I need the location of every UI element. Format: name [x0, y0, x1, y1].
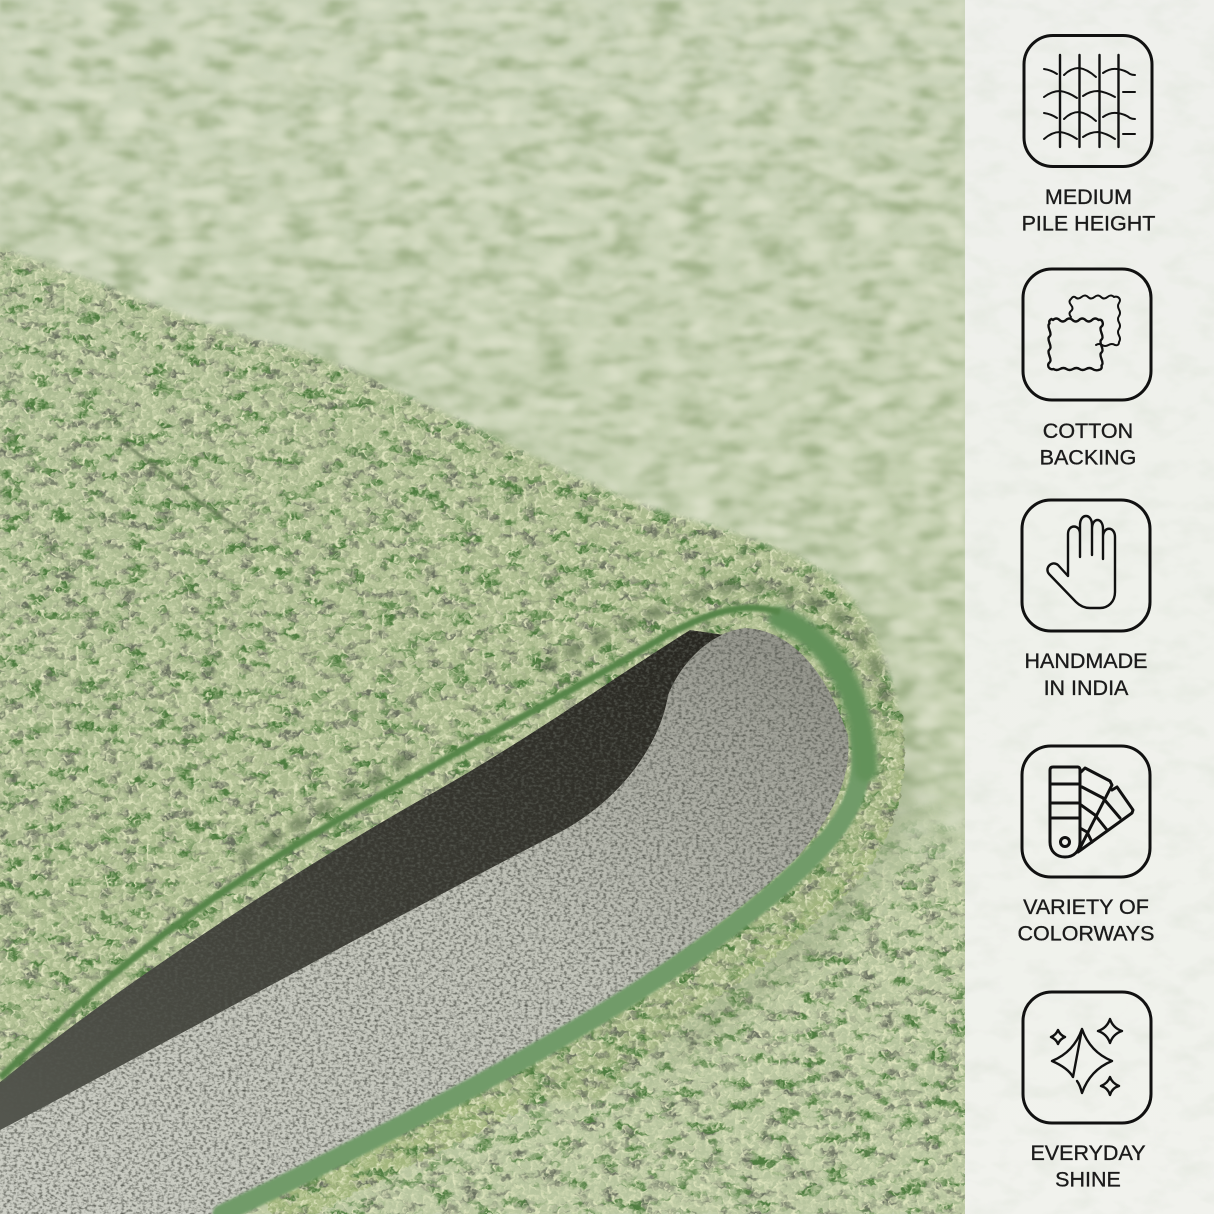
feature: medium pile height — [1022, 36, 1155, 236]
label: variety of colorways: VARIETY OF — [1023, 895, 1149, 919]
green binding edge upper — [0, 608, 780, 1078]
shadow beneath roll — [640, 740, 920, 1090]
icon: sparkles — [1023, 992, 1151, 1123]
label: everyday shine: EVERYDAY — [1030, 1141, 1146, 1165]
icon: fabric swatches — [1023, 269, 1151, 400]
feature: everyday shine — [1023, 992, 1151, 1192]
icon: woven pile — [1024, 36, 1152, 166]
icon: colour fan deck — [1022, 746, 1150, 877]
crease on rug — [120, 440, 245, 532]
cotton backing — [0, 628, 849, 1214]
label: variety of colorways: COLORWAYS — [1018, 922, 1154, 946]
label: handmade in india: HANDMADE — [1024, 649, 1148, 673]
green binding edge lower — [222, 735, 862, 1214]
dark hollow inside roll — [0, 630, 760, 1140]
feature: cotton backing — [1023, 269, 1151, 470]
icon: open hand — [1022, 500, 1150, 631]
label: medium pile height: MEDIUM — [1045, 185, 1132, 209]
speckle along fold — [240, 586, 885, 860]
lower rug surface — [245, 819, 965, 1214]
label: handmade in india: IN INDIA — [1044, 676, 1129, 700]
panel: features sidebar — [965, 0, 1214, 1214]
feature: variety of colorways — [1018, 746, 1154, 946]
label: everyday shine: SHINE — [1055, 1168, 1121, 1192]
blurred rug floor — [0, 0, 965, 1214]
pile strip beside binding — [270, 715, 886, 1214]
feature: handmade in india — [1022, 500, 1150, 700]
green binding curve right — [780, 618, 866, 770]
photo: rolled green rug — [0, 0, 965, 1214]
label: medium pile height: PILE HEIGHT — [1022, 212, 1155, 236]
label: cotton backing: COTTON — [1043, 419, 1133, 443]
rug top surface — [0, 248, 905, 1102]
label: cotton backing: BACKING — [1040, 446, 1136, 470]
